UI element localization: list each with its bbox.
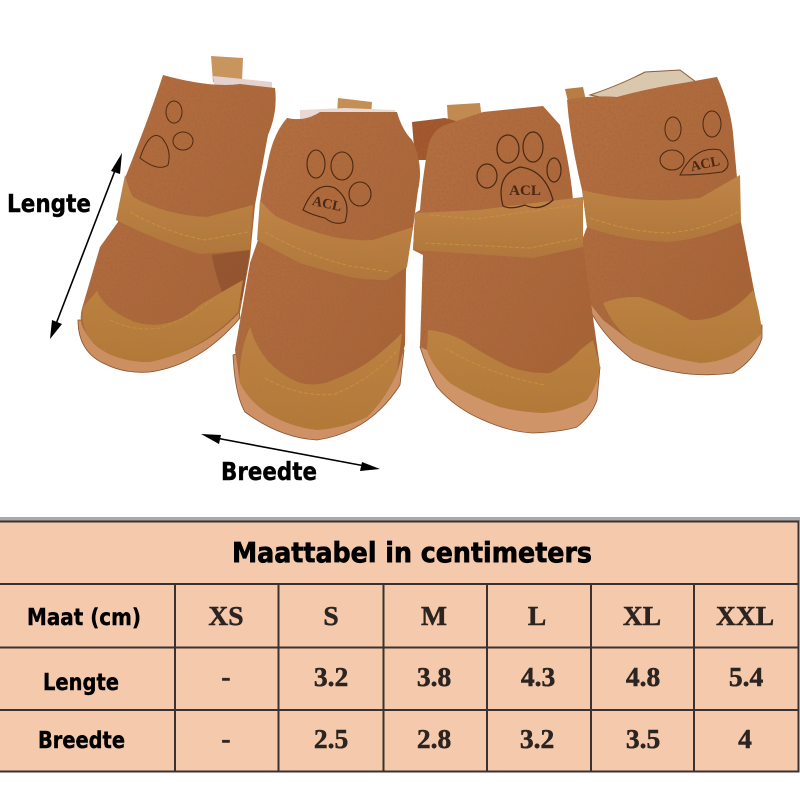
row: length: 4.8 bbox=[626, 661, 660, 692]
row: width: Breedte bbox=[38, 728, 125, 754]
row: sizes: L bbox=[528, 600, 546, 631]
row: width: - bbox=[221, 723, 231, 754]
row: length: 3.2 bbox=[314, 661, 348, 692]
row: sizes: S bbox=[323, 600, 339, 631]
label: Breedte: Breedte bbox=[221, 457, 317, 486]
row: length: 4.3 bbox=[521, 661, 555, 692]
arrow: width bbox=[201, 434, 380, 471]
paw print 4: ACL bbox=[689, 154, 721, 175]
row: sizes: Maat (cm) bbox=[27, 605, 141, 631]
row: length: Lengte bbox=[43, 670, 119, 696]
paw print 2 bbox=[303, 150, 371, 223]
boot 1 far left bbox=[78, 56, 276, 372]
paw print 3: ACL bbox=[509, 183, 541, 199]
arrow: length bbox=[50, 153, 122, 339]
row: length: 3.8 bbox=[417, 661, 451, 692]
boot 3 centre right bbox=[412, 103, 600, 433]
boot 2 centre left bbox=[233, 98, 420, 440]
paw print 4 bbox=[660, 111, 728, 175]
table background bbox=[0, 517, 800, 521]
size table bbox=[0, 517, 800, 772]
row: length: 5.4 bbox=[729, 661, 763, 692]
row: length bbox=[43, 661, 763, 696]
row: sizes: XXL bbox=[716, 600, 774, 631]
row: width: 2.8 bbox=[417, 723, 451, 754]
row: length: - bbox=[221, 661, 231, 692]
boot 4 far right bbox=[565, 70, 762, 375]
paw print 1 bbox=[140, 101, 193, 167]
row: width: 3.5 bbox=[626, 723, 660, 754]
row: width: 4 bbox=[738, 723, 752, 754]
photo: four brown dog boots bbox=[78, 56, 762, 440]
row: sizes: M bbox=[421, 600, 447, 631]
row: width: 3.2 bbox=[520, 723, 554, 754]
row: width: 2.5 bbox=[314, 723, 348, 754]
paw print 3 bbox=[477, 132, 561, 208]
row: sizes: XL bbox=[623, 600, 661, 631]
label: Lengte: Lengte bbox=[7, 189, 91, 218]
row: sizes: XS bbox=[208, 600, 244, 631]
row: sizes bbox=[27, 600, 774, 631]
paw print 2: ACL bbox=[311, 194, 343, 215]
table title: Maattabel in centimeters bbox=[232, 537, 592, 569]
row: width bbox=[38, 723, 752, 754]
